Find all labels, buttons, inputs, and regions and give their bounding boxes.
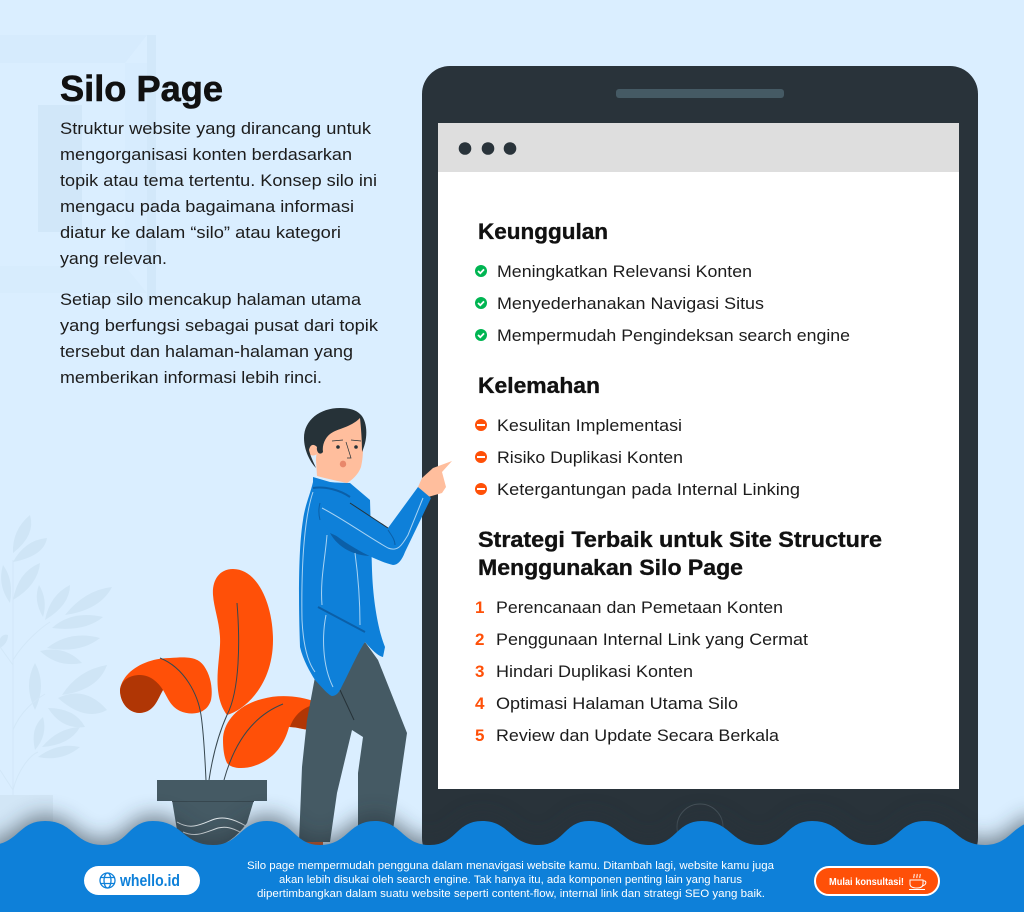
list: strategy steps: Perencanaan dan Pemetaan Konten: [496, 598, 783, 617]
sleeve shadow: [330, 533, 372, 556]
list: advantages: [475, 262, 850, 345]
intro paragraph 1: mengacu pada bagaimana informasi: [60, 197, 354, 216]
pot: [172, 800, 254, 846]
list: strategy steps: Optimasi Halaman Utama Silo: [496, 694, 738, 713]
trousers: [299, 642, 407, 842]
left leaf: [120, 657, 212, 713]
list: strategy steps: 2: [475, 630, 484, 649]
list: strategy steps: 5: [475, 726, 484, 745]
list: strategy steps: 4: [475, 694, 485, 713]
logo pill: whello.id: whello.id: [119, 871, 180, 890]
intro paragraph 1: topik atau tema tertentu. Konsep silo ini: [60, 171, 377, 190]
heading: Keunggulan: Keunggulan: [478, 219, 608, 244]
heading: strategy: Menggunakan Silo Page: [478, 555, 743, 580]
neck and face: [316, 416, 363, 483]
icon: globe: [100, 873, 115, 888]
collar: [313, 477, 350, 497]
intro paragraph 2: Setiap silo mencakup halaman utama: [60, 290, 362, 309]
tablet device: [422, 66, 978, 866]
top leaf: [213, 569, 273, 715]
heading: strategy: Strategi Terbaik untuk Site Structure: [478, 527, 882, 552]
logo pill: whello.id: [84, 866, 200, 895]
eyes, nose and mouth: [332, 440, 361, 467]
icon: coffee cup: [909, 874, 926, 890]
illustration: potted plant: [120, 569, 316, 846]
list: strategy steps: Review dan Update Secara Berkala: [496, 726, 780, 745]
tablet home button: [677, 804, 723, 850]
intro paragraph 1: yang relevan.: [60, 249, 167, 268]
tablet screen: [438, 123, 959, 789]
wave shadow: [0, 815, 1024, 912]
browser dots: [459, 142, 516, 155]
list: strategy steps: Hindari Duplikasi Konten: [496, 662, 693, 681]
right leaf: [223, 696, 316, 768]
intro paragraph 1: Struktur website yang dirancang untuk: [60, 119, 372, 138]
footer text: [247, 860, 775, 900]
list: advantages: Mempermudah Pengindeksan search engine: [497, 326, 850, 345]
list: weaknesses: [475, 416, 800, 499]
footer text: Silo page mempermudah pengguna dalam menavigasi website kamu. Ditambah lagi, website kamu juga: [247, 860, 775, 872]
button: Mulai konsultasi: Mulai konsultasi!: [829, 877, 904, 888]
footer text: akan lebih disukai oleh search engine. Tak hanya itu, ada komponen penting lain yang harus: [279, 874, 743, 886]
intro paragraph 2: yang berfungsi sebagai pusat dari topik: [60, 316, 379, 335]
title: Silo Page: [60, 68, 223, 109]
hand: [418, 461, 452, 497]
footer text: dipertimbangkan dalam suatu website seperti content-flow, internal link dan strategi SEO yang baik.: [257, 888, 765, 900]
faint background window shape: [0, 35, 156, 300]
shirt seams: [302, 492, 423, 687]
list: strategy steps: Penggunaan Internal Link yang Cermat: [496, 630, 808, 649]
list: weaknesses: Ketergantungan pada Internal Linking: [497, 480, 800, 499]
footer wave band: [0, 821, 1024, 912]
stems: [160, 603, 283, 780]
intro paragraph 1: mengorganisasi konten berdasarkan: [60, 145, 352, 164]
list: strategy steps: [475, 598, 808, 745]
faint background plant: [0, 515, 112, 850]
list: weaknesses: Kesulitan Implementasi: [497, 416, 682, 435]
list: strategy steps: 3: [475, 662, 484, 681]
sleeve: [320, 487, 431, 565]
intro paragraph 2: memberikan informasi lebih rinci.: [60, 368, 322, 387]
list: strategy steps: 1: [475, 598, 484, 617]
intro paragraph 2: tersebut dan halaman-halaman yang: [60, 342, 353, 361]
illustration: man pointing at the tablet: [299, 408, 452, 846]
list: weaknesses: Risiko Duplikasi Konten: [497, 448, 683, 467]
button: Mulai konsultasi: [815, 867, 939, 895]
tablet speaker: [616, 89, 784, 98]
heading: Kelemahan: Kelemahan: [478, 373, 600, 398]
intro paragraph 2: [60, 290, 379, 387]
list: advantages: Meningkatkan Relevansi Konten: [497, 262, 752, 281]
shirt body: [299, 482, 385, 696]
heading: strategy: [478, 527, 882, 580]
list: advantages: Menyederhanakan Navigasi Situs: [497, 294, 764, 313]
shoe: [305, 841, 323, 846]
intro paragraph 1: diatur ke dalam “silo” atau kategori: [60, 223, 341, 242]
intro paragraph 1: [60, 119, 377, 268]
hair: [304, 408, 366, 468]
pocket: [318, 607, 365, 632]
